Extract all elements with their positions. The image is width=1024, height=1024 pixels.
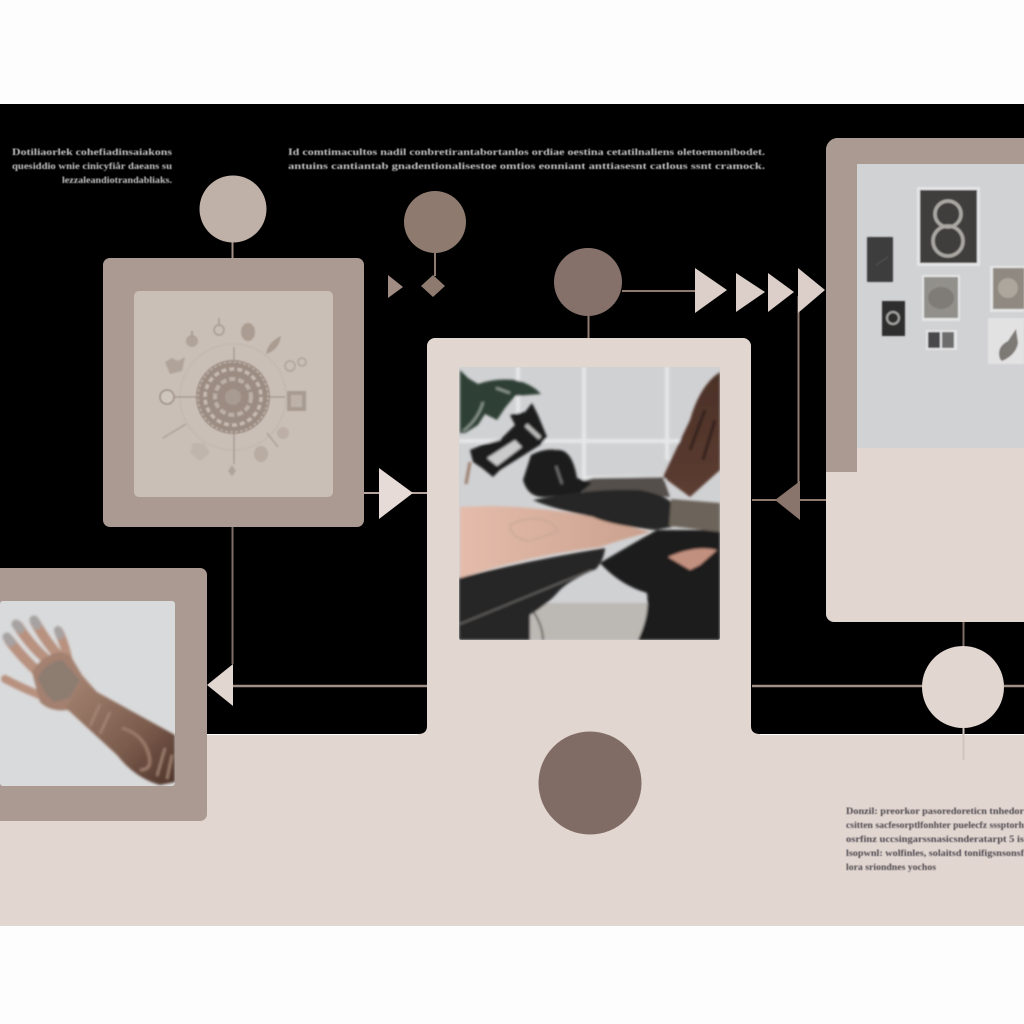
arrow: to center card [379, 468, 413, 519]
tattoo machine [470, 403, 547, 477]
black main panel [0, 104, 1024, 734]
panel: lower left card [0, 568, 207, 821]
icon: small triangle [388, 275, 403, 298]
icon: small diamond [421, 275, 445, 297]
artist forearm tattoo [663, 372, 720, 497]
gloved hands [523, 450, 592, 497]
photo: gallery wall [857, 164, 1024, 448]
text block: top left: lezzaleandiotrandabliaks. [62, 175, 172, 185]
chair [459, 548, 605, 640]
text block: bottom right: lora sriondnes yochos [846, 862, 937, 872]
plant [460, 370, 541, 433]
circle: right [922, 646, 1004, 728]
circle: top middle [404, 191, 466, 253]
circle: bottom center [538, 732, 642, 834]
panel: design card [103, 258, 364, 527]
text block: bottom right: lsopwnl: wolfinles, solaitsd tonifigsnsonsf [846, 848, 1024, 858]
photo: tattooed arm [5, 620, 175, 785]
text block: bottom right [846, 806, 1024, 872]
skin at ripped jeans [668, 549, 717, 570]
dark legs [600, 530, 720, 640]
beige bottom band [0, 735, 1024, 926]
text block: bottom right: osrfinz uccsingarssnasicsnderatarpt 5 is [846, 834, 1024, 844]
arrow: pointing left from right card [775, 481, 800, 520]
text block: top middle: Id comtimacultos nadil conbretirantabortanlos ordiae oestina cetatilnaliens oletoemonibodet. [288, 147, 765, 157]
text block: top middle [288, 147, 765, 171]
text block: top left [12, 147, 173, 185]
connector lines [232, 224, 1024, 760]
circle: upper center [554, 248, 622, 316]
arrow: to lower left card [207, 664, 233, 706]
icon: mandala diagram [160, 318, 306, 476]
photo: tattoo session [459, 367, 720, 640]
panel: center card [418, 338, 760, 740]
panel: right card [826, 138, 1024, 622]
arrows: row of four triangles [695, 268, 825, 313]
window frame [459, 367, 683, 483]
text block: top middle: antuins cantiantab gnadentionalisestoe omtios eonniant anttiasesnt catlous ssnt cramock. [288, 161, 765, 171]
circle: top left [200, 176, 266, 242]
text block: top left: Dotiliaorlek cohefiadinsaiakons [12, 147, 173, 157]
client arm [460, 506, 650, 578]
text block: bottom right: csitten sacfesorptlfonhter puelecfz sssptorh [846, 820, 1024, 830]
floor and white base [530, 603, 660, 640]
text block: top left: quesiddio wnie cinicyfiår daeans su [12, 161, 172, 171]
text block: bottom right: Donzil: preorkor pasoredoreticn tnhedor [846, 806, 1024, 816]
